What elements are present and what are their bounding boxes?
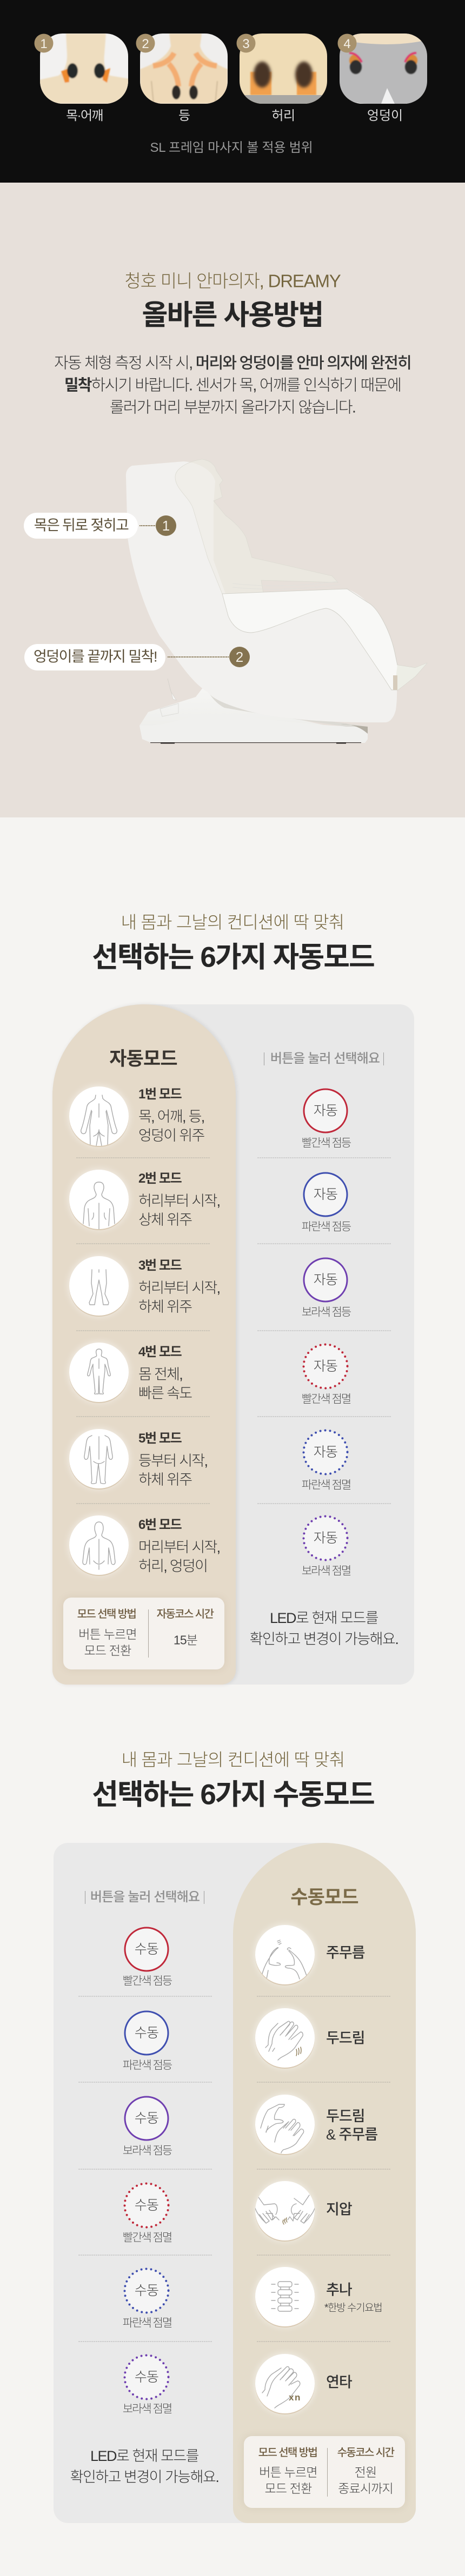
LED: blinking purple xyxy=(303,1515,348,1561)
LED label: 빨간색 점등 xyxy=(302,1137,350,1150)
divider xyxy=(257,1416,391,1417)
heading: manual mode: 수동모드 xyxy=(290,1887,358,1908)
LED: blinking purple: 수동 xyxy=(135,2370,158,2385)
chair base xyxy=(140,679,368,743)
LED: blinking red: 수동 xyxy=(135,2198,158,2213)
text: mode 5 xyxy=(138,1431,207,1488)
LED label: 파란색 점등 xyxy=(123,2060,171,2071)
text: mode 6: 허리, 엉덩이 xyxy=(138,1558,207,1574)
numbered badges: 4 xyxy=(343,37,351,51)
icon: tapping and kneading xyxy=(255,2095,315,2154)
icon: acupressure xyxy=(255,2181,315,2240)
subtitle: 내 몸과 그날의 컨디션에 딱 맞춰 xyxy=(122,1750,344,1769)
LED note xyxy=(250,1610,398,1647)
LED label: 파란색 점멸 xyxy=(123,2317,171,2330)
panel: manual modes xyxy=(54,1843,416,2523)
body text: 밀착하시기 바랍니다. 센서가 목, 어깨를 인식하기 때문에 xyxy=(64,377,401,394)
box body: selection method: 모드 전환 xyxy=(84,1643,131,1658)
text: mode 5: 5번 모드 xyxy=(138,1431,181,1446)
body text: 롤러가 머리 부분까지 올라가지 않습니다. xyxy=(110,399,355,416)
LED: solid purple xyxy=(124,2096,169,2141)
numbered badges: 2 xyxy=(142,37,149,51)
box body: selection method xyxy=(78,1627,137,1658)
LED note: 확인하고 변경이 가능해요. xyxy=(250,1631,398,1647)
text: mode 5: 등부터 시작, xyxy=(138,1453,207,1469)
info box: auto mode xyxy=(63,1598,224,1669)
label: tapping and kneading: 두드림 xyxy=(326,2108,365,2124)
text: mode 1 xyxy=(138,1087,204,1143)
label: tapping and kneading: & 주무름 xyxy=(326,2126,377,2143)
LED note: LED로 현재 모드를 xyxy=(270,1610,378,1626)
label: back: 등 xyxy=(178,109,190,123)
subtitle: 내 몸과 그날의 컨디션에 딱 맞춰 xyxy=(121,913,344,932)
callout 2: hips xyxy=(24,644,165,670)
divider xyxy=(257,1503,391,1504)
badge 2 xyxy=(229,647,250,667)
box divider xyxy=(148,1609,149,1658)
title: 선택하는 6가지 수동모드 xyxy=(92,1779,374,1811)
box body: time xyxy=(338,2465,393,2496)
label: repeated strike: 연타 xyxy=(326,2374,352,2390)
divider xyxy=(76,1503,210,1504)
label: waist: 허리 xyxy=(271,109,295,123)
icon: mode 2 body xyxy=(69,1170,129,1229)
label: tapping and kneading xyxy=(326,2108,377,2143)
text: mode 3: 하체 위주 xyxy=(138,1299,191,1315)
box body: selection method: 버튼 누르면 xyxy=(259,2465,317,2479)
badge 1: 1 xyxy=(162,518,170,534)
LED note: 확인하고 변경이 가능해요. xyxy=(70,2469,218,2485)
info box: manual mode xyxy=(244,2436,405,2508)
callout 1 text: 목은 뒤로 젖히고 xyxy=(34,518,128,534)
massage area thumbnails xyxy=(35,33,427,104)
LED: blinking purple xyxy=(123,2354,170,2400)
panel: auto modes xyxy=(52,1004,414,1685)
LED: solid purple: 수동 xyxy=(135,2111,158,2126)
LED label: 보라색 점멸 xyxy=(123,2403,171,2415)
divider xyxy=(257,1157,391,1158)
box body: selection method xyxy=(259,2465,317,2496)
text: mode 5: 하체 위주 xyxy=(138,1472,191,1488)
title: 올바른 사용방법 xyxy=(142,300,323,331)
icon: mode 4 body xyxy=(69,1343,129,1402)
divider xyxy=(78,1996,212,1997)
heading: press button: 버튼을 눌러 선택해요 xyxy=(90,1890,200,1904)
LED: blinking blue xyxy=(123,2268,170,2313)
box header: course time: 수동코스 시간 xyxy=(337,2447,394,2459)
seat cushion lines xyxy=(232,581,341,589)
thumbnail 4: hips xyxy=(340,33,427,104)
LED label: 파란색 점멸 xyxy=(302,1479,350,1491)
divider xyxy=(76,1416,210,1417)
text: mode 4: 빠른 속도 xyxy=(138,1385,191,1401)
LED: blinking red xyxy=(123,2183,170,2228)
text: mode 1: 1번 모드 xyxy=(138,1087,181,1102)
LED: solid purple xyxy=(303,1258,348,1302)
heading: auto mode: 자동모드 xyxy=(109,1048,177,1070)
label: tapping: 두드림 xyxy=(326,2030,365,2047)
text: mode 4: 몸 전체, xyxy=(138,1366,182,1383)
LED: solid blue: 자동 xyxy=(314,1187,337,1202)
numbered badges: 1 xyxy=(40,37,48,51)
divider xyxy=(257,2169,390,2170)
box divider xyxy=(327,2448,328,2497)
divider xyxy=(257,2255,390,2256)
icon: mode 1 body xyxy=(69,1086,129,1146)
box header: selection method: 모드 선택 방법 xyxy=(77,1608,136,1620)
LED label: 빨간색 점멸 xyxy=(123,2231,171,2244)
box body: time: 15분 xyxy=(174,1633,197,1647)
LED: blinking purple: 자동 xyxy=(314,1531,337,1546)
box header: course time: 자동코스 시간 xyxy=(157,1608,213,1620)
LED: solid red: 수동 xyxy=(135,1942,158,1957)
caption: SL 프레임 마사지 볼 적용 범위 xyxy=(150,140,313,155)
LED: solid red xyxy=(124,1927,169,1972)
dotted leader 2 xyxy=(168,656,230,658)
body text xyxy=(54,354,411,416)
divider xyxy=(257,1996,390,1997)
icon: mode 5 body xyxy=(69,1429,129,1488)
badge 1 xyxy=(156,515,176,536)
LED: solid red: 자동 xyxy=(314,1103,337,1118)
box body: time: 전원 xyxy=(355,2465,376,2479)
section: six auto modes xyxy=(0,817,465,1702)
text: mode 3: 3번 모드 xyxy=(138,1258,181,1273)
text: mode 1: 목, 어깨, 등, xyxy=(138,1109,204,1125)
text: mode 3 xyxy=(138,1258,220,1315)
subtitle: 청호 미니 안마의자, DREAMY xyxy=(124,271,341,291)
thumbnail 2: back xyxy=(140,33,228,104)
panel: mode list xyxy=(52,1004,236,1685)
LED note xyxy=(70,2448,218,2485)
LED label: 보라색 점멸 xyxy=(302,1565,350,1578)
callout 1: neck xyxy=(24,513,138,539)
LED: solid blue xyxy=(124,2011,169,2055)
LED: solid purple: 자동 xyxy=(314,1272,337,1287)
LED: blinking red xyxy=(303,1343,348,1390)
seated person lower body xyxy=(222,589,427,690)
label: acupressure: 지압 xyxy=(326,2201,352,2217)
panel: mode list xyxy=(233,1843,416,2523)
badge 2: 2 xyxy=(236,649,243,665)
LED: blinking blue xyxy=(303,1430,348,1475)
text: mode 2: 허리부터 시작, xyxy=(138,1193,220,1209)
numbered badges: 3 xyxy=(242,37,250,51)
thumbnail 3: waist xyxy=(240,33,327,104)
divider xyxy=(257,1243,391,1244)
text: mode 3: 허리부터 시작, xyxy=(138,1280,220,1296)
box header: selection method: 모드 선택 방법 xyxy=(258,2447,317,2459)
divider xyxy=(257,1330,391,1331)
label: chuna: 추나 xyxy=(326,2282,352,2298)
LED label: 보라색 점등 xyxy=(302,1306,350,1318)
icon: repeated strike: xn xyxy=(289,2392,301,2403)
massage chair illustration with seated person xyxy=(126,459,427,743)
body text: 자동 체형 측정 시작 시, 머리와 엉덩이를 안마 의자에 완전히 xyxy=(54,354,411,372)
section: correct usage xyxy=(0,183,465,817)
title: 선택하는 6가지 자동모드 xyxy=(92,941,374,974)
icon: repeated strike xyxy=(255,2354,315,2413)
divider xyxy=(76,1243,210,1244)
LED: solid blue xyxy=(303,1172,348,1217)
divider xyxy=(78,2341,212,2342)
section: massage ball coverage xyxy=(0,0,465,183)
label note: chuna: *한방 수기요법 xyxy=(324,2303,382,2313)
divider xyxy=(76,1330,210,1331)
icon: kneading xyxy=(255,1925,315,1984)
divider xyxy=(257,2082,390,2083)
leg tag xyxy=(393,675,397,690)
icon: mode 6 body xyxy=(69,1515,129,1575)
text: mode 6: 머리부터 시작, xyxy=(138,1539,220,1555)
callout 2 text: 엉덩이를 끝까지 밀착! xyxy=(34,648,157,665)
numbered badges xyxy=(35,33,357,53)
LED: blinking red: 자동 xyxy=(314,1359,337,1374)
text: mode 4: 4번 모드 xyxy=(138,1345,181,1359)
text: mode 4 xyxy=(138,1345,192,1401)
text: mode 1: 엉덩이 위주 xyxy=(138,1127,204,1143)
text: mode 2 xyxy=(138,1171,220,1227)
LED label: 빨간색 점등 xyxy=(123,1975,171,1987)
icon: spine chuna xyxy=(255,2267,315,2326)
divider xyxy=(76,1157,210,1158)
dotted leader 1 xyxy=(140,525,157,526)
seated person upper body xyxy=(175,459,338,596)
LED: solid red xyxy=(303,1088,348,1133)
text: mode 6 xyxy=(138,1518,220,1574)
label: neck and shoulder: 목·어깨 xyxy=(66,109,103,123)
text: mode 2: 2번 모드 xyxy=(138,1171,181,1186)
label: kneading: 주무름 xyxy=(326,1945,365,1961)
divider xyxy=(78,2169,212,2170)
LED: solid blue: 수동 xyxy=(135,2025,158,2041)
LED: blinking blue: 자동 xyxy=(314,1445,337,1460)
icon: mode 3 body xyxy=(69,1256,129,1316)
LED note: LED로 현재 모드를 xyxy=(90,2448,198,2464)
chair body xyxy=(126,461,397,722)
divider xyxy=(78,2082,212,2083)
label: hips: 엉덩이 xyxy=(367,109,403,123)
box body: time: 종료시까지 xyxy=(338,2481,393,2496)
LED label: 파란색 점등 xyxy=(302,1221,350,1233)
heading: press button: 버튼을 눌러 선택해요 xyxy=(270,1051,380,1066)
text: mode 2: 상체 위주 xyxy=(138,1211,191,1227)
foot xyxy=(394,663,427,690)
box body: selection method: 모드 전환 xyxy=(264,2481,312,2496)
LED label: 빨간색 점멸 xyxy=(302,1393,350,1406)
thumbnail 1: neck and shoulder xyxy=(39,33,130,104)
section: six manual modes xyxy=(0,1702,465,2576)
icon: tapping xyxy=(255,2008,315,2068)
heading bar right xyxy=(383,1052,384,1065)
box body: selection method: 버튼 누르면 xyxy=(78,1627,137,1641)
divider xyxy=(78,2255,212,2256)
text: mode 6: 6번 모드 xyxy=(138,1518,181,1532)
LED label: 보라색 점등 xyxy=(123,2145,171,2157)
divider xyxy=(257,2341,390,2342)
LED: blinking blue: 수동 xyxy=(135,2283,158,2298)
